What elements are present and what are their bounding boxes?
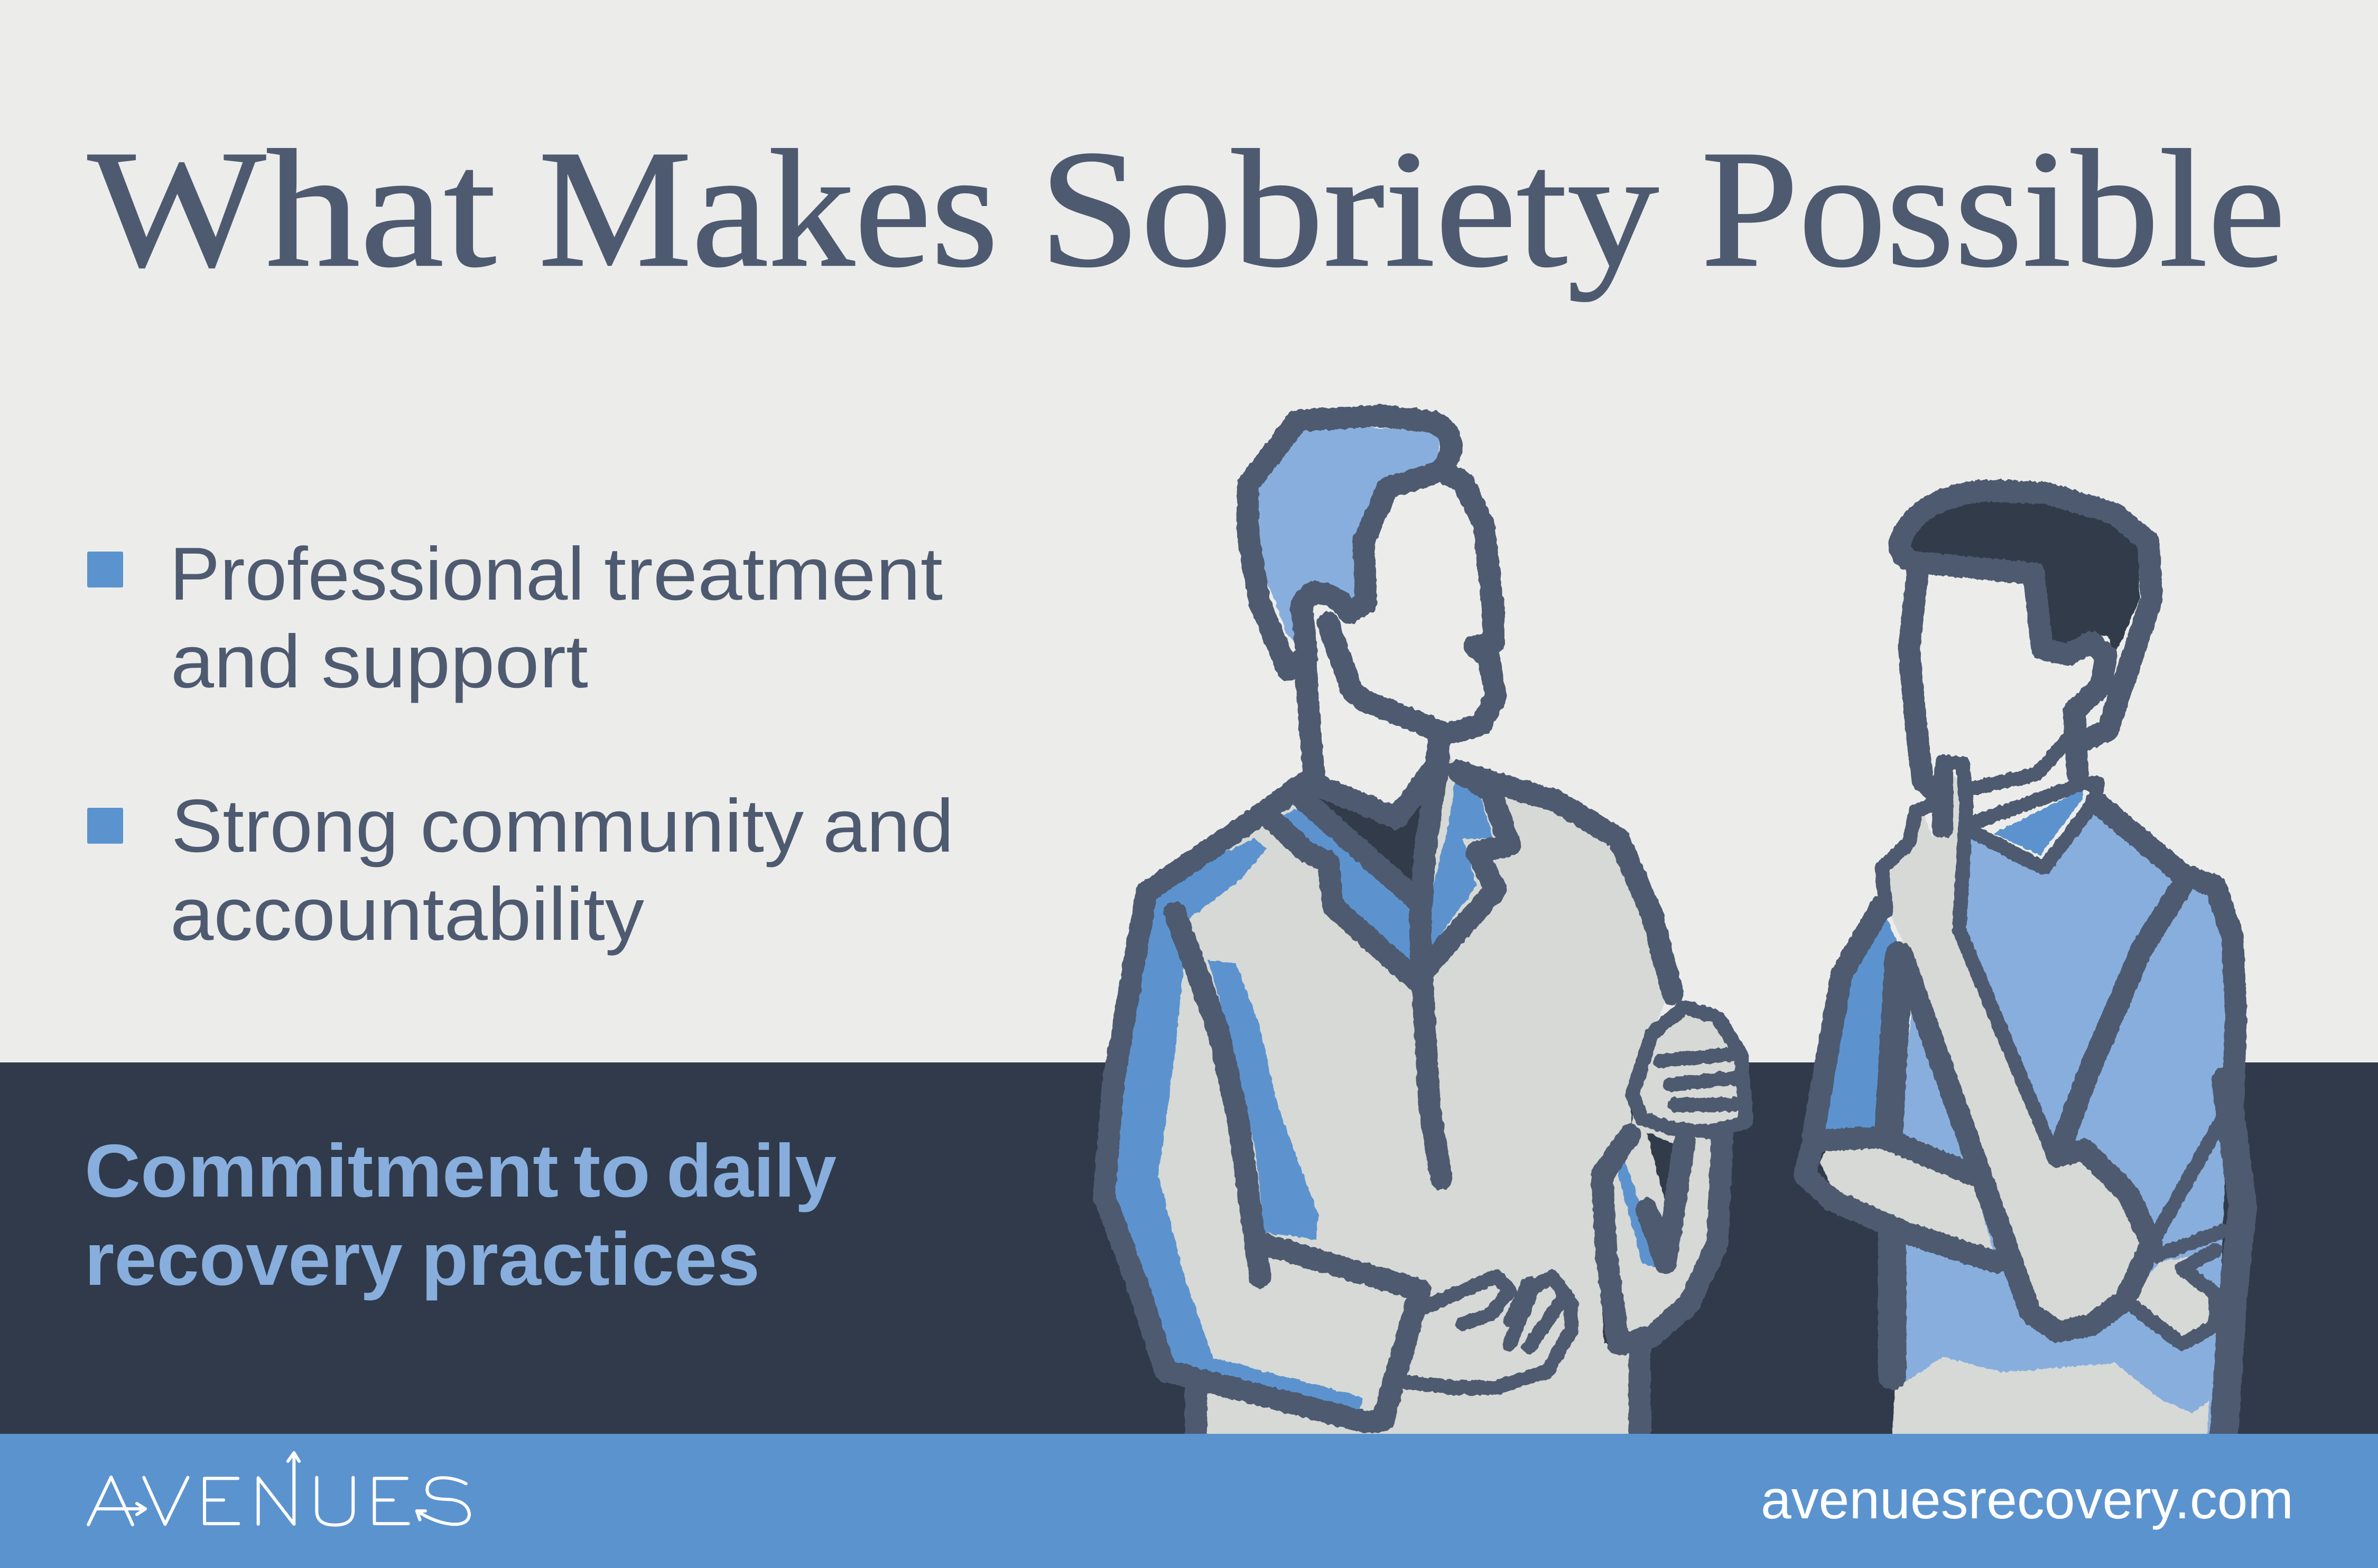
bullet text: professional treatment: treatment <box>604 532 943 616</box>
bullet text: strong community: and <box>823 784 954 868</box>
callout: commitment: practices <box>421 1217 760 1301</box>
lower forearm <box>1820 1141 1995 1256</box>
bullet text: professional treatment: support <box>321 620 588 704</box>
bullet text: strong community: accountability <box>170 872 644 956</box>
shirt <box>1899 808 2240 1437</box>
bullet text: strong community: community <box>420 784 804 868</box>
title: Sobriety <box>1039 116 1659 302</box>
callout: commitment: daily <box>666 1129 837 1213</box>
dark band <box>0 1062 2378 1434</box>
collar <box>1274 778 1493 973</box>
sleeve shading <box>1099 838 1363 1412</box>
bullet text: strong community <box>170 784 954 956</box>
illustration: man with light blue hair <box>1097 415 1746 1459</box>
illustration: man with dark hair <box>1805 491 2243 1457</box>
undershirt <box>1312 791 1432 892</box>
sweater body <box>1097 758 1670 1437</box>
raised arm and hand <box>1889 774 2145 1328</box>
bullet text: professional treatment: Professional <box>170 532 584 616</box>
bullet marker: strong community <box>87 808 123 844</box>
bullet text: strong community: Strong <box>171 784 398 868</box>
title <box>88 116 2286 302</box>
callout: commitment: recovery <box>85 1217 403 1301</box>
collar <box>1993 790 2083 855</box>
bullet marker: professional treatment <box>87 552 123 587</box>
callout: commitment <box>85 1129 837 1301</box>
outlines <box>1805 491 2243 1457</box>
sleeve <box>1825 906 1902 1134</box>
shirt hem <box>1892 1357 2209 1437</box>
title: Possible <box>1701 116 2286 302</box>
title: Makes <box>538 116 998 302</box>
bullet text: professional treatment: and <box>171 620 301 704</box>
bullet text: professional treatment <box>170 532 943 704</box>
hair <box>1257 424 1439 643</box>
callout: commitment: to <box>573 1129 651 1213</box>
raised forearm and fist <box>1602 1007 1746 1344</box>
torso shading <box>1208 960 1319 1239</box>
outlines <box>1104 415 1746 1459</box>
bullet list <box>87 532 954 956</box>
hair <box>1906 492 2140 655</box>
callout: commitment: Commitment <box>85 1129 559 1213</box>
title: What <box>88 116 497 302</box>
tucked hand <box>2131 1250 2216 1338</box>
footer band <box>0 1434 2378 1568</box>
logo: Avenues <box>88 1453 469 1525</box>
website url: avenuesrecovery.com <box>1761 1469 2293 1530</box>
